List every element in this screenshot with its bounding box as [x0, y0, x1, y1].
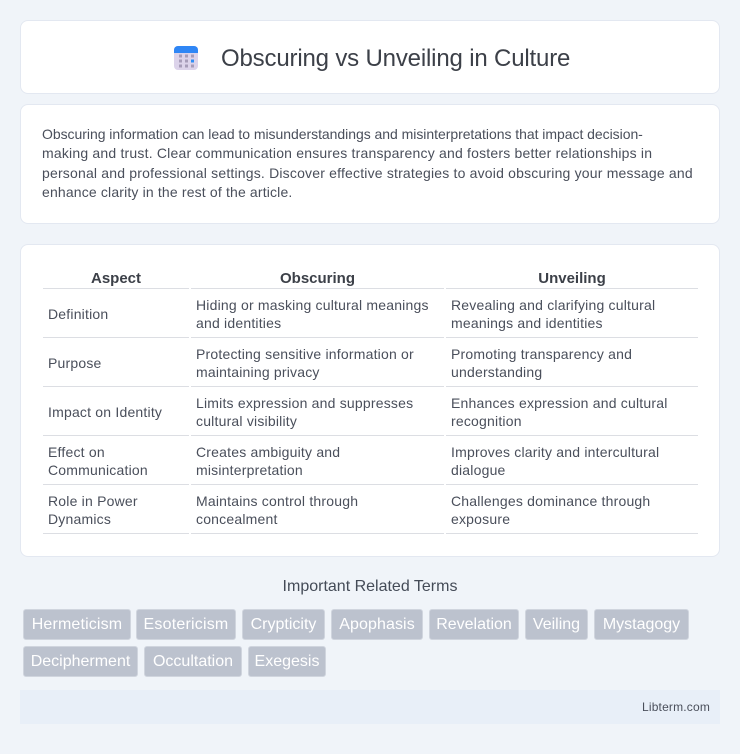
table header: Aspect	[91, 270, 141, 287]
related terms tags: Decipherment	[31, 653, 130, 670]
footer source: Libterm.com	[642, 700, 710, 714]
row: Definition: Hiding or masking cultural meanings	[196, 297, 429, 313]
row: Purpose: maintaining privacy	[196, 364, 320, 380]
row: Role in Power Dynamics: Dynamics	[48, 511, 111, 527]
related terms tags: Hermeticism	[32, 616, 122, 633]
footer bar	[20, 690, 720, 724]
related terms tags: Occultation	[153, 653, 233, 670]
related terms tags: Mystagogy	[603, 616, 680, 633]
row: Role in Power Dynamics: Maintains control through	[196, 493, 358, 509]
row: Role in Power Dynamics	[48, 493, 650, 527]
related terms tags: Veiling	[533, 616, 580, 633]
row: Role in Power Dynamics: Role in Power	[48, 493, 138, 509]
intro text: Obscuring information can lead to misunderstandings and misinterpretations that impact decision-	[42, 126, 643, 142]
row: Effect on Communication: dialogue	[451, 462, 506, 478]
row: Purpose: Protecting sensitive information or	[196, 346, 414, 362]
row: Effect on Communication	[48, 444, 659, 478]
row: Impact on Identity: Enhances expression and cultural	[451, 395, 668, 411]
icon: calendar	[174, 46, 198, 70]
row: Definition: Revealing and clarifying cultural	[451, 297, 655, 313]
row: Purpose: Purpose	[48, 355, 102, 371]
row: Definition	[48, 297, 655, 331]
row: Effect on Communication: Creates ambiguity and	[196, 444, 340, 460]
intro text: making and trust. Clear communication ensures transparency and fosters better relationships in	[42, 145, 652, 161]
intro text: enhance clarity in the rest of the article.	[42, 184, 292, 200]
intro text: personal and professional settings. Discover effective strategies to avoid obscuring your message and	[42, 165, 693, 181]
row: Impact on Identity	[48, 395, 668, 429]
row: Role in Power Dynamics: exposure	[451, 511, 510, 527]
row: Impact on Identity: Limits expression and suppresses	[196, 395, 413, 411]
related terms heading: Important Related Terms	[283, 578, 457, 595]
row: Definition: and identities	[196, 315, 281, 331]
row: Effect on Communication: Communication	[48, 462, 148, 478]
related terms tags: Apophasis	[339, 616, 415, 633]
row: Role in Power Dynamics: concealment	[196, 511, 278, 527]
related terms tags: Esotericism	[144, 616, 228, 633]
table header: Obscuring	[280, 270, 355, 287]
row: Purpose: Promoting transparency and	[451, 346, 632, 362]
row: Effect on Communication: Effect on	[48, 444, 105, 460]
row: Impact on Identity: Impact on Identity	[48, 404, 162, 420]
header panel	[20, 20, 720, 94]
intro panel	[20, 104, 720, 224]
row: Effect on Communication: misinterpretation	[196, 462, 303, 478]
related terms tags: Crypticity	[251, 616, 316, 633]
row: Purpose	[48, 346, 632, 380]
row: Purpose: understanding	[451, 364, 542, 380]
intro text	[42, 126, 693, 200]
table header: Unveiling	[538, 270, 606, 287]
row: Role in Power Dynamics: Challenges dominance through	[451, 493, 650, 509]
comparison table panel	[20, 244, 720, 557]
row: Impact on Identity: cultural visibility	[196, 413, 297, 429]
related terms tags	[23, 609, 689, 677]
table header	[91, 270, 606, 287]
row: Impact on Identity: recognition	[451, 413, 522, 429]
row: Effect on Communication: Improves clarity and intercultural	[451, 444, 659, 460]
related terms tags: Revelation	[436, 616, 512, 633]
row: Definition: Definition	[48, 306, 108, 322]
row: Definition: meanings and identities	[451, 315, 603, 331]
related terms tags: Exegesis	[255, 653, 319, 670]
title: Obscuring vs Unveiling in Culture	[221, 45, 570, 72]
